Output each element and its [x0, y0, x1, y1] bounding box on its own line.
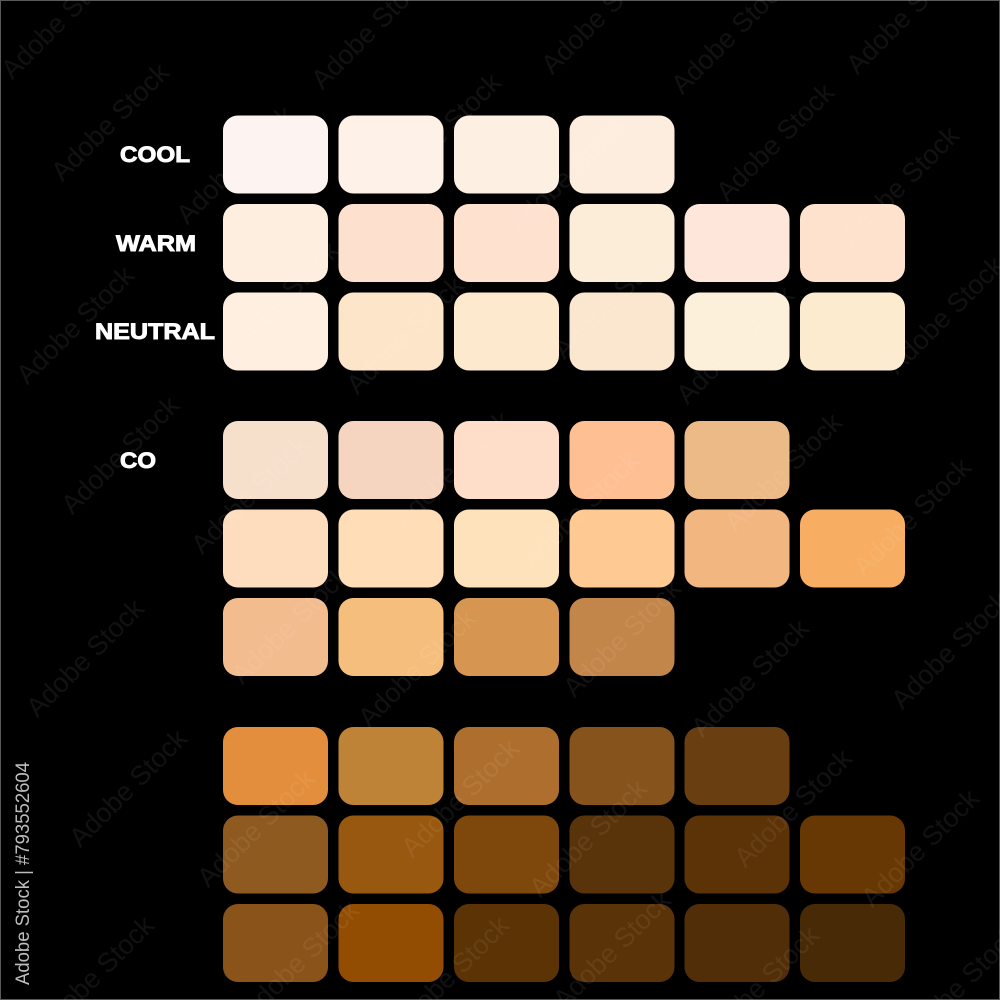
- text: Adobe Stock: [718, 407, 848, 537]
- text: Adobe Stock: [710, 77, 840, 207]
- row: neutral light tones: [223, 292, 905, 370]
- text: Adobe Stock: [185, 430, 315, 560]
- text: Adobe Stock: [728, 743, 858, 873]
- text: Adobe Stock: [63, 723, 193, 853]
- panel: light swatches: [95, 116, 905, 370]
- label: WARM: WARM: [116, 231, 196, 256]
- text: Adobe Stock: [547, 235, 677, 365]
- label: CO: CO: [120, 448, 156, 473]
- text: Adobe Stock: [170, 100, 300, 230]
- text: Adobe Stock: [395, 733, 525, 863]
- text: Adobe Stock: [847, 452, 977, 582]
- text: Adobe Stock: [352, 603, 482, 733]
- text: Adobe Stock: [515, 445, 645, 575]
- text: Adobe Stock: [855, 783, 985, 913]
- text: Adobe Stock: [377, 67, 507, 197]
- text: Adobe Stock: [670, 280, 800, 410]
- text: Adobe Stock: [387, 405, 517, 535]
- label: NEUTRAL: NEUTRAL: [95, 319, 215, 344]
- panel: dark swatches: [223, 727, 905, 982]
- text: Adobe Stock: [45, 57, 175, 187]
- row: warm light tones: [223, 204, 905, 282]
- text: Adobe Stock: [340, 270, 470, 400]
- text: Adobe Stock: [835, 120, 965, 250]
- row: medium tones 1: [223, 421, 790, 499]
- row: cool light tones: [223, 116, 674, 194]
- text: Adobe Stock: [55, 390, 185, 520]
- text: Adobe Stock: [215, 235, 345, 365]
- row: dark tones 1: [223, 727, 790, 805]
- text: Adobe Stock: [191, 763, 321, 893]
- text: Adobe Stock: [502, 110, 632, 240]
- text: Adobe Stock: [557, 573, 687, 703]
- row: medium tones 2: [223, 510, 905, 588]
- row: medium tones 3: [223, 598, 674, 676]
- text: Adobe Stock: [225, 560, 355, 690]
- row: dark tones 3: [223, 904, 905, 982]
- text: Adobe Stock: [685, 613, 815, 743]
- stock id sidebar: Adobe Stock | #793552604: [13, 762, 34, 985]
- text: Adobe Stock: [10, 260, 140, 390]
- panel: medium swatches: [120, 421, 905, 676]
- row: dark tones 2: [223, 816, 905, 894]
- label: COOL: COOL: [120, 142, 190, 167]
- text: Adobe Stock: [523, 773, 653, 903]
- text: Adobe Stock: [20, 593, 150, 723]
